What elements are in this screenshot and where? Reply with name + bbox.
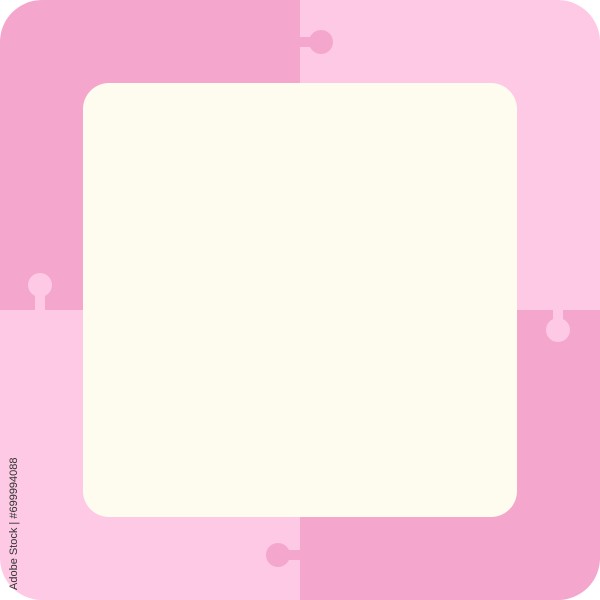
central cream panel bbox=[83, 83, 517, 517]
piece: bottom-right dark bbox=[300, 310, 600, 600]
piece: bottom-left light bbox=[0, 300, 300, 600]
knob: bottom bbox=[266, 543, 302, 567]
piece: top-left dark bbox=[0, 0, 300, 310]
stock id text: Adobe Stock | #699994088 bbox=[8, 457, 20, 590]
knob: top bbox=[298, 30, 333, 54]
knob: left bbox=[28, 273, 52, 312]
knob: right bbox=[546, 310, 570, 342]
piece: top-right light bbox=[300, 0, 600, 310]
